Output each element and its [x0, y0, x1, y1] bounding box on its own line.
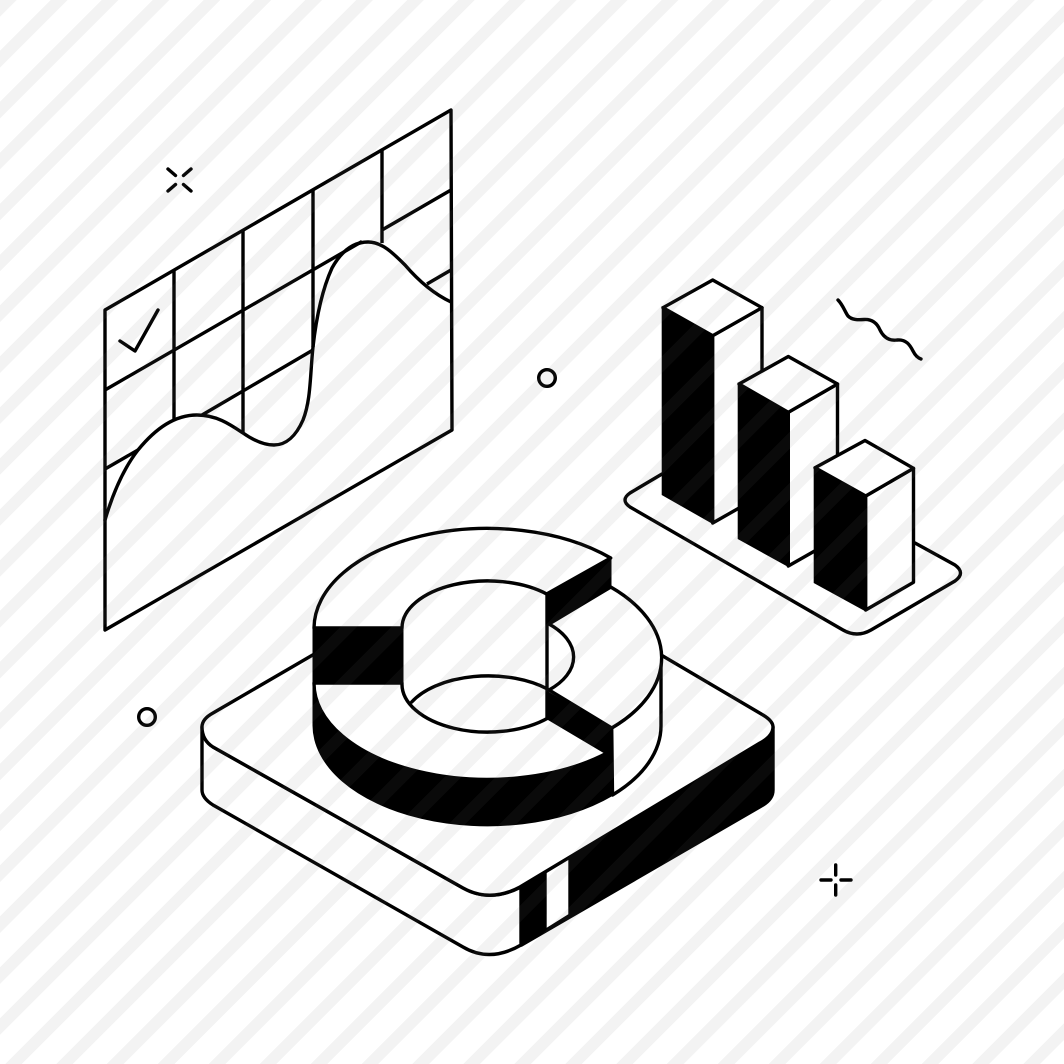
- icon: plus sparkle: [821, 865, 851, 895]
- chart sheet: [105, 110, 452, 630]
- donut black left step: [312, 628, 404, 684]
- donut segment right: [549, 587, 662, 728]
- platform right black wall: [522, 727, 773, 945]
- panel: line chart on grid: [105, 110, 452, 630]
- icon: squiggle: [838, 300, 921, 359]
- donut hole floor and inner edge: [412, 594, 548, 717]
- icon: small circle upper: [539, 370, 555, 386]
- chart curve: [105, 242, 451, 520]
- donut black upper step: [546, 556, 612, 624]
- panel: donut chart: [312, 528, 662, 826]
- donut right wall: [612, 657, 661, 795]
- bar 1: [662, 280, 762, 524]
- donut outer black wall: [312, 680, 612, 826]
- icon: check mark: [120, 310, 158, 351]
- donut hole: [402, 581, 574, 732]
- icon: cross sparkle: [168, 169, 191, 191]
- panel: bar chart: [625, 280, 960, 634]
- bar 2: [738, 356, 838, 567]
- platform window stripe: [547, 856, 568, 928]
- panel: platform: [202, 553, 773, 955]
- bar 3: [814, 440, 914, 612]
- bar chart base: [625, 474, 960, 634]
- donut black lower step: [548, 692, 612, 760]
- chart grid lines: [105, 150, 451, 469]
- donut segment top: [314, 528, 611, 628]
- platform left wall: [202, 727, 521, 955]
- icon: small circle lower: [139, 709, 155, 725]
- donut segment lower: [314, 683, 607, 779]
- platform top surface: [202, 553, 773, 895]
